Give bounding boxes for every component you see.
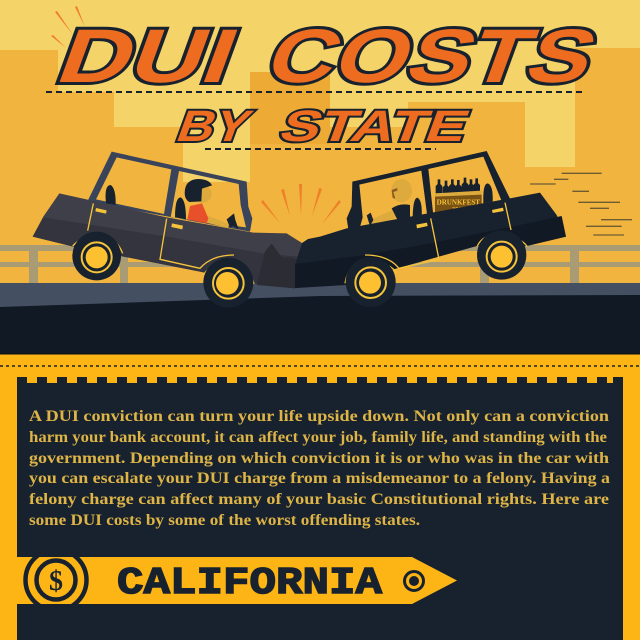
beer case with bottles: 2015 bbox=[452, 206, 465, 213]
rear wheel bbox=[72, 232, 121, 280]
rear seat bbox=[483, 183, 493, 203]
panel: intro frame bbox=[0, 353, 640, 640]
title: DUI COSTS: DUI bbox=[47, 13, 250, 98]
crumpled hood bbox=[257, 243, 298, 288]
driver: man bbox=[367, 179, 422, 226]
divider: lower title dashes bbox=[205, 148, 436, 150]
icon: title spark lines bbox=[51, 6, 85, 48]
panel: skyline background bbox=[0, 0, 640, 354]
text block: introduction: some DUI costs by some of the worst offending states. bbox=[29, 512, 420, 529]
beer case with bottles: DRUNKFEST bbox=[437, 199, 480, 207]
icon: speed lines bbox=[530, 173, 632, 235]
title: BY STATE bbox=[170, 101, 476, 151]
rear wheel bbox=[477, 230, 526, 280]
title: BY STATE: BY bbox=[170, 101, 258, 151]
door handles bbox=[416, 208, 504, 228]
state name: CALIFORNIA bbox=[117, 562, 382, 605]
door lines bbox=[345, 203, 527, 283]
banner: California bbox=[17, 557, 457, 604]
icon: right car bbox=[295, 151, 632, 307]
divider: upper title dashes bbox=[46, 91, 583, 93]
title: DUI COSTS bbox=[47, 13, 609, 98]
icon: dollar coin bbox=[23, 557, 89, 604]
body bbox=[295, 193, 566, 288]
icon: crash impact lines bbox=[261, 184, 341, 224]
door lines bbox=[73, 203, 254, 284]
right car frame and windows bbox=[347, 151, 511, 229]
rear seat bbox=[106, 185, 116, 205]
title: BY STATE: STATE bbox=[273, 101, 476, 151]
icon: dollar coin: $ bbox=[49, 566, 63, 597]
door handles bbox=[95, 208, 183, 229]
text block: introduction: government. Depending on which conviction it is or who was in the car with bbox=[29, 450, 609, 467]
front wheel bbox=[203, 258, 253, 308]
text block: introduction: A DUI conviction can turn your life upside down. Not only can a conviction bbox=[29, 408, 609, 425]
driver: woman bbox=[175, 179, 239, 229]
icon: left car bbox=[33, 152, 302, 308]
text block: introduction: you can escalate your DUI charge from a misdemeanor to a felony. Having a bbox=[29, 470, 610, 487]
text block: introduction: felony charge can affect many of your basic Constitutional rights. Here are bbox=[29, 491, 609, 508]
beer case with bottles bbox=[435, 178, 482, 214]
road bbox=[0, 283, 640, 354]
guardrail bbox=[0, 245, 640, 283]
icon: banner target bbox=[404, 572, 424, 590]
left car frame and windows bbox=[87, 152, 252, 232]
body bbox=[33, 193, 302, 288]
text block: introduction bbox=[29, 408, 610, 529]
text block: introduction: harm your bank account, it can affect your job, family life, and standing with the bbox=[29, 429, 607, 446]
front wheel bbox=[346, 257, 396, 307]
title: DUI COSTS: COSTS bbox=[256, 13, 609, 98]
